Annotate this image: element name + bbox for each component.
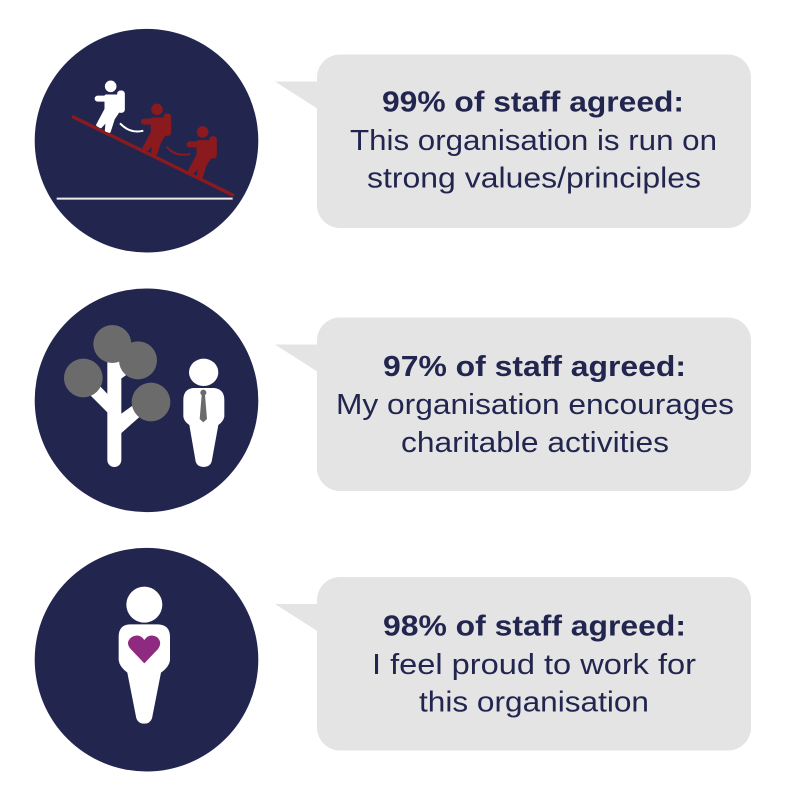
icon: hikers climbing a slope <box>35 29 258 252</box>
speech bubble: 98%: 98% of staff agreed: <box>383 610 686 642</box>
speech bubble: 97%: charitable activities <box>401 427 669 459</box>
speech bubble: 97%: My organisation encourages <box>336 389 734 421</box>
icon: person with heart <box>35 548 258 772</box>
speech bubble: 97% <box>275 318 751 491</box>
row 1: values <box>35 29 751 252</box>
speech bubble: 98%: this organisation <box>419 686 649 718</box>
icon: person beside a tree <box>35 288 258 512</box>
row 2: charitable activities <box>35 288 751 512</box>
speech bubble: 97%: 97% of staff agreed: <box>383 351 686 383</box>
speech bubble: 99%: strong values/principles <box>367 162 701 194</box>
speech bubble: 98%: I feel proud to work for <box>372 649 696 681</box>
speech bubble: 99% <box>275 54 751 228</box>
speech bubble: 99%: This organisation is run on <box>350 125 717 157</box>
row 3: pride <box>35 548 751 772</box>
speech bubble: 99%: 99% of staff agreed: <box>382 86 684 118</box>
speech bubble: 98% <box>275 577 751 750</box>
